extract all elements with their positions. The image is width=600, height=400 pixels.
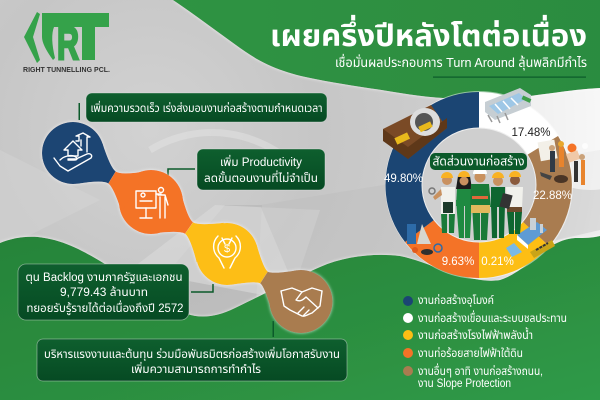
- value: 9.63%: 9.63%: [442, 256, 474, 268]
- segment: blue 49.80%: [385, 92, 479, 242]
- logo: Right Tunnelling: R: [57, 17, 79, 69]
- divider under subtitle: [433, 76, 586, 78]
- worker 1: [429, 172, 455, 233]
- logo: Right Tunnelling: RIGHT TUNNELLING PCL.: [23, 67, 110, 74]
- legend item: others: งานอื่นๆ อาทิ งานก่อสร้างถนน,: [418, 363, 543, 378]
- illustration: cable duct: [407, 224, 442, 255]
- segment: orange 9.63%: [405, 220, 479, 278]
- donut chart: construction share: [383, 88, 588, 279]
- callout box 3: [18, 264, 189, 320]
- title: เผยครึ่งปีหลังโตต่อเนื่อง: [270, 14, 587, 53]
- connector: box 2 to orange circle: [168, 169, 195, 178]
- callout box 1: เพิ่มความรวดเร็ว เร่งส่งมอบงานก่อสร้างตามกำหนดเวลา: [90, 101, 322, 115]
- legend item: hydro plant: งานก่อสร้างโรงไฟฟ้าพลังน้ำ: [418, 327, 533, 342]
- legend item: hydro plant: [403, 327, 533, 342]
- logo: Right Tunnelling: [23, 12, 110, 74]
- legend item: dam: งานก่อสร้างเขื่อนและระบบชลประทาน: [418, 310, 567, 325]
- illustration: hydro power plant: [506, 218, 555, 258]
- icon: hand lifting house and arrows: [54, 133, 92, 171]
- worker 2: [456, 171, 472, 238]
- step 4: brown circle: [260, 270, 332, 333]
- worker 5: [499, 171, 523, 234]
- legend item: others: งาน Slope Protection: [418, 378, 511, 390]
- callout box 2: [197, 149, 325, 190]
- callout box 3: 9,779.43 ล้านบาท: [60, 285, 148, 299]
- worker 4: [491, 172, 505, 238]
- callout box 3: ทยอยรับรู้รายได้ต่อเนื่องถึงปี 2572: [26, 300, 184, 315]
- callout box 3: ตุน Backlog งานภาครัฐและเอกชน: [26, 271, 182, 284]
- segment: yellow 0.21%: [479, 222, 549, 278]
- step 1: blue circle: [42, 122, 116, 184]
- icon: presenter at a board: [136, 188, 168, 218]
- donut centre label pill: สัดส่วนงานก่อสร้าง: [432, 154, 524, 168]
- legend: [403, 293, 567, 390]
- illustration: dam: [485, 88, 531, 123]
- green wave: top: [173, 0, 600, 99]
- process chain: four linked circles: [42, 122, 332, 333]
- segment: brown 22.88%: [523, 136, 572, 246]
- connector: box 3 to yellow circle: [191, 284, 213, 292]
- callout box 4: เพิ่มความสามารถการทำกำไร: [131, 362, 261, 376]
- icon: hands holding a coin: $: [224, 243, 230, 255]
- step 2: orange circle: [108, 170, 193, 234]
- connector: box 1 to blue circle: [78, 103, 80, 120]
- legend item: underground cable: งานท่อร้อยสายไฟฟ้าใต้ดิน: [418, 346, 523, 360]
- value: 0.21%: 0.21%: [481, 256, 514, 268]
- legend item: others: [403, 363, 543, 390]
- value: 17.48%: 17.48%: [511, 127, 551, 139]
- value: 49.80%: 49.80%: [384, 173, 423, 185]
- callout box 2: ลดขั้นตอนงานที่ไม่จำเป็น: [204, 170, 318, 185]
- segment: white 17.48%: [479, 92, 558, 155]
- value: 22.88%: 22.88%: [533, 190, 572, 202]
- illustration: engineers on site: [538, 140, 588, 185]
- callout box 1: [86, 93, 327, 122]
- subtitle: เชื่อมั่นผลประกอบการ Turn Around ลุ้นพลิกมีกำไร: [335, 53, 587, 70]
- callout box 4: บริหารแรงงานและต้นทุน ร่วมมือพันธมิตรก่อสร้างเพิ่มโอกาสรับงาน: [44, 347, 340, 361]
- icon: hands holding a coin: [214, 236, 240, 268]
- worker 3: [470, 167, 491, 240]
- step 3: yellow circle: [185, 222, 268, 285]
- green wave: bottom: [0, 236, 600, 400]
- legend item: underground cable: [403, 346, 523, 360]
- callout box 4: [37, 339, 347, 381]
- workers group: [429, 167, 523, 240]
- callout box 2: เพิ่ม Productivity: [220, 155, 302, 169]
- illustration: tunnel boring cutaway: [383, 105, 447, 159]
- legend item: tunnel: [403, 293, 494, 307]
- legend item: tunnel: งานก่อสร้างอุโมงค์: [418, 293, 494, 307]
- legend item: dam: [403, 310, 567, 325]
- chart centre: [422, 128, 536, 242]
- connector: box 4 to brown circle: [272, 321, 274, 337]
- icon: handshake: [281, 288, 322, 316]
